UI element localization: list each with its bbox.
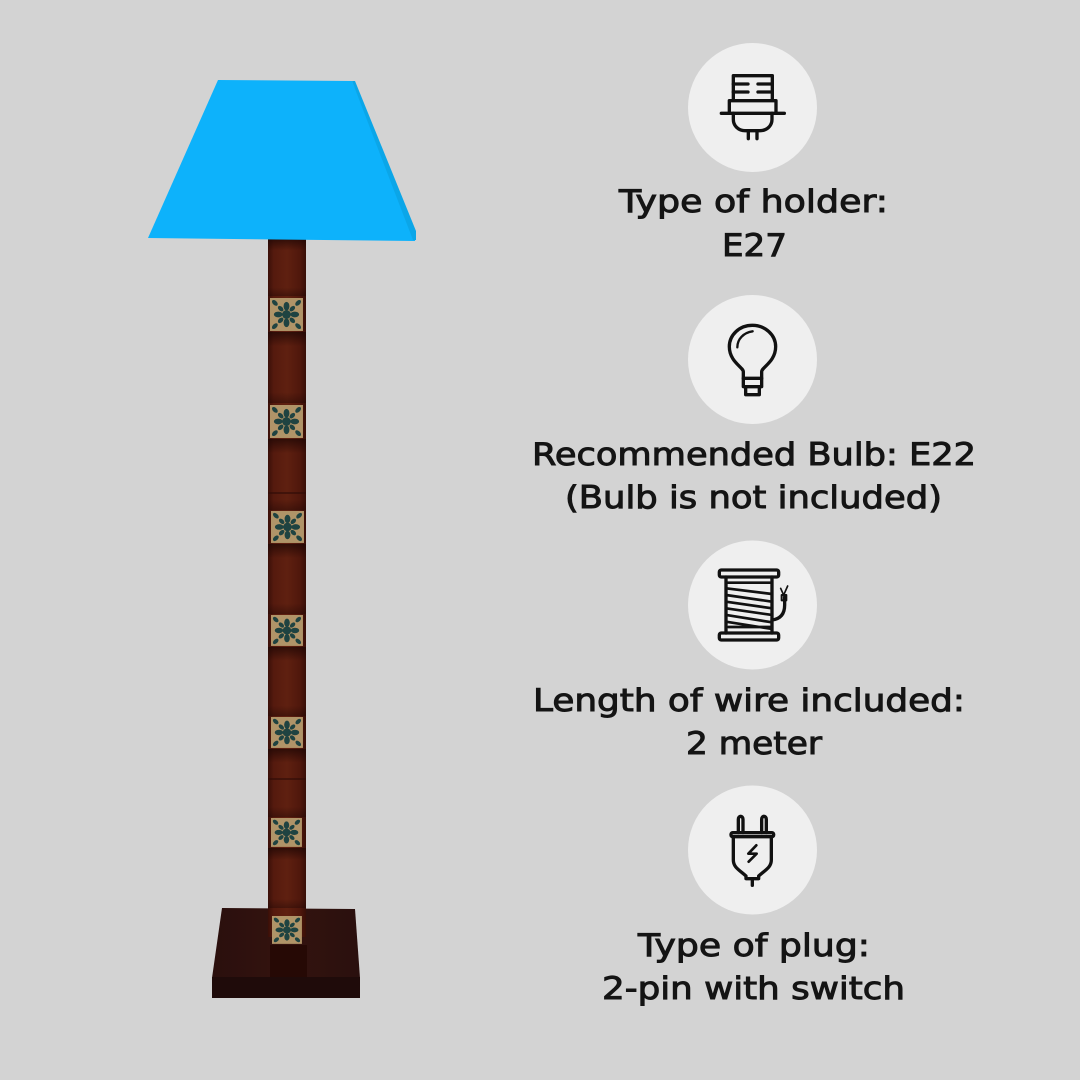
feature: plug type: [602, 786, 905, 1007]
lamp base: [212, 908, 360, 998]
floor lamp product illustration: [148, 80, 416, 998]
text: 2 meter: 2 meter: [686, 726, 822, 762]
blue lamp shade: [148, 80, 416, 241]
icon: lamp holder: [721, 76, 784, 139]
text: length of wire: Length of wire included:: [533, 683, 965, 719]
feature: recommended bulb: [532, 295, 976, 516]
icon circle: wire spool: [688, 540, 817, 670]
decorative tiles on shaft: [270, 298, 304, 944]
text: E27: E27: [722, 228, 787, 264]
text: bulb not included: (Bulb is not included): [565, 480, 942, 516]
icon circle: holder: [688, 43, 817, 172]
icon: two-pin plug: [731, 816, 774, 885]
text: type of plug: Type of plug:: [637, 928, 870, 964]
text: recommended bulb: Recommended Bulb: E22: [532, 437, 976, 473]
icon circle: bulb: [688, 295, 817, 424]
text: type of holder: Type of holder:: [618, 184, 888, 220]
lamp shaft: [268, 239, 306, 937]
icon: wire spool: [719, 570, 788, 640]
feature: type of holder: [618, 43, 888, 264]
text: 2-pin with switch: 2-pin with switch: [602, 971, 905, 1007]
feature: wire length: [533, 540, 965, 762]
icon circle: plug: [688, 786, 817, 914]
icon: light bulb: [729, 325, 776, 395]
